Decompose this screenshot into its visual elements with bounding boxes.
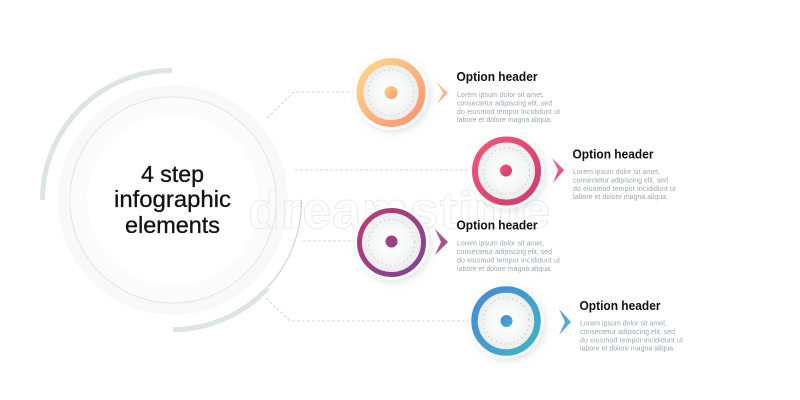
text: step 3: do eiusmod tempor incididunt ut bbox=[457, 258, 560, 264]
title: infographic bbox=[114, 186, 231, 212]
icon: step 4 dial bbox=[468, 284, 544, 358]
watermark: dreamstime bbox=[248, 182, 550, 240]
arrow: step 1 bbox=[436, 81, 448, 104]
arrow: step 4 bbox=[559, 309, 571, 335]
text: step 2: Lorem ipsum dolor sit amet, bbox=[573, 169, 660, 176]
step 1 bbox=[354, 55, 560, 130]
arrow: step 2 bbox=[552, 158, 564, 183]
arrow: step 3 bbox=[435, 229, 448, 255]
text: step 4: labore et dolore magna aliqua. bbox=[580, 346, 675, 352]
icon: step 1 dial bbox=[354, 55, 428, 130]
title bbox=[114, 161, 231, 238]
arc: bottom right bbox=[173, 200, 302, 330]
text: step 2: do eiusmod tempor incididunt ut bbox=[573, 186, 676, 193]
text: step 4: do eiusmod tempor incididunt ut bbox=[580, 338, 683, 344]
icon: step 2 dial bbox=[469, 134, 544, 208]
text: step 1: labore et dolore magna aliqua. bbox=[457, 117, 552, 124]
step 3 bbox=[354, 205, 560, 280]
text: step 1: Lorem ipsum dolor sit amet, bbox=[457, 92, 544, 99]
text: step 2: labore et dolore magna aliqua. bbox=[573, 194, 668, 201]
text: step 1: consectetur adipiscing elit, sed bbox=[457, 100, 552, 108]
central circle bbox=[64, 91, 282, 309]
text: step 3: Lorem ipsum dolor sit amet, bbox=[457, 240, 544, 248]
text: step 3: consectetur adipiscing elit, sed bbox=[457, 249, 552, 256]
heading: step 2: Option header bbox=[572, 148, 654, 162]
icon: step 3 dial bbox=[354, 205, 429, 280]
title: elements bbox=[125, 212, 220, 238]
title: 4 step bbox=[141, 161, 204, 187]
heading: step 4: Option header bbox=[580, 299, 661, 313]
dashed connector lines bbox=[266, 92, 472, 321]
text: step 3: labore et dolore magna aliqua. bbox=[457, 266, 552, 273]
heading: step 3: Option header bbox=[456, 218, 538, 232]
heading: step 1: Option header bbox=[456, 70, 538, 84]
text: step 4: consectetur adipiscing elit, sed bbox=[580, 329, 675, 336]
text: step 2: consectetur adipiscing elit, sed bbox=[573, 178, 668, 184]
text: step 1: do eiusmod tempor incididunt ut bbox=[457, 109, 560, 116]
arc: top left bbox=[42, 70, 172, 200]
text: step 4: Lorem ipsum dolor sit amet, bbox=[580, 320, 667, 328]
step 4 bbox=[468, 284, 683, 358]
step 2 bbox=[469, 134, 676, 208]
